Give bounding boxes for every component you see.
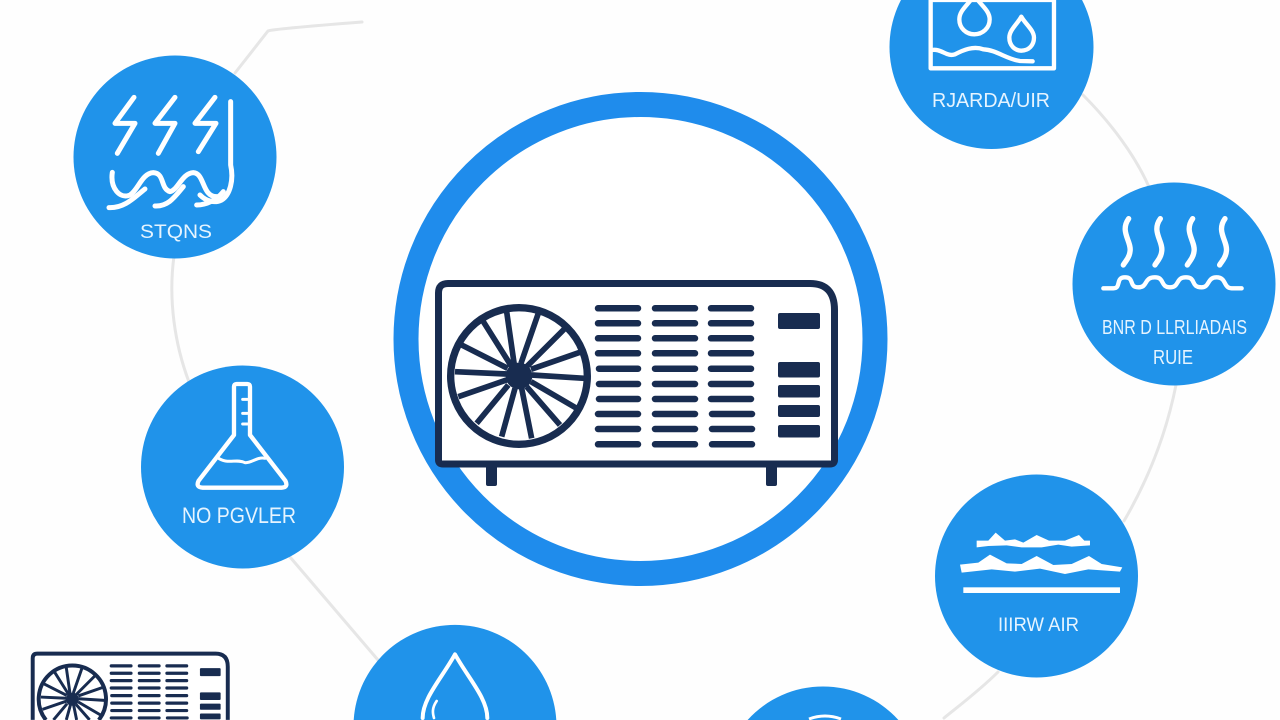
panel: bottom circle [748,686,898,720]
label: NO PGVLER: NO PGVLER [182,503,296,528]
vent slats [598,308,752,444]
label: RUIE: RUIE [1153,347,1193,369]
side control blocks [778,313,820,438]
central air conditioner unit [438,284,834,486]
connector lines between circles [172,22,1176,718]
small air conditioner icon, bottom left [33,654,228,720]
panel: water box circle [890,0,1094,149]
icon: heat waves over water [1103,219,1242,288]
panel: water drop circle [354,625,556,720]
label: RJARDA/UIR: RJARDA/UIR [932,90,1050,112]
label: STQNS: STQNS [140,222,212,243]
icon: lightning bolts over waves [109,97,232,208]
unit legs [486,462,777,486]
central blue ring [406,104,875,574]
fan wheel [451,308,587,444]
icon: droplets in a tank [931,0,1054,68]
icon: water drop [423,654,487,718]
panel: no power circle [141,366,344,568]
icon: air waves [960,533,1122,593]
panel: warm air circle [935,474,1138,678]
icon: partly visible dial [809,716,841,719]
label: BNR D LLRLIADAIS: BNR D LLRLIADAIS [1102,317,1247,339]
label: IIIRW AIR: IIIRW AIR [998,615,1079,636]
icon: laboratory flask [198,384,286,488]
unit body [438,284,834,464]
panel: storms circle [74,56,276,258]
panel: steam circle [1072,182,1276,386]
